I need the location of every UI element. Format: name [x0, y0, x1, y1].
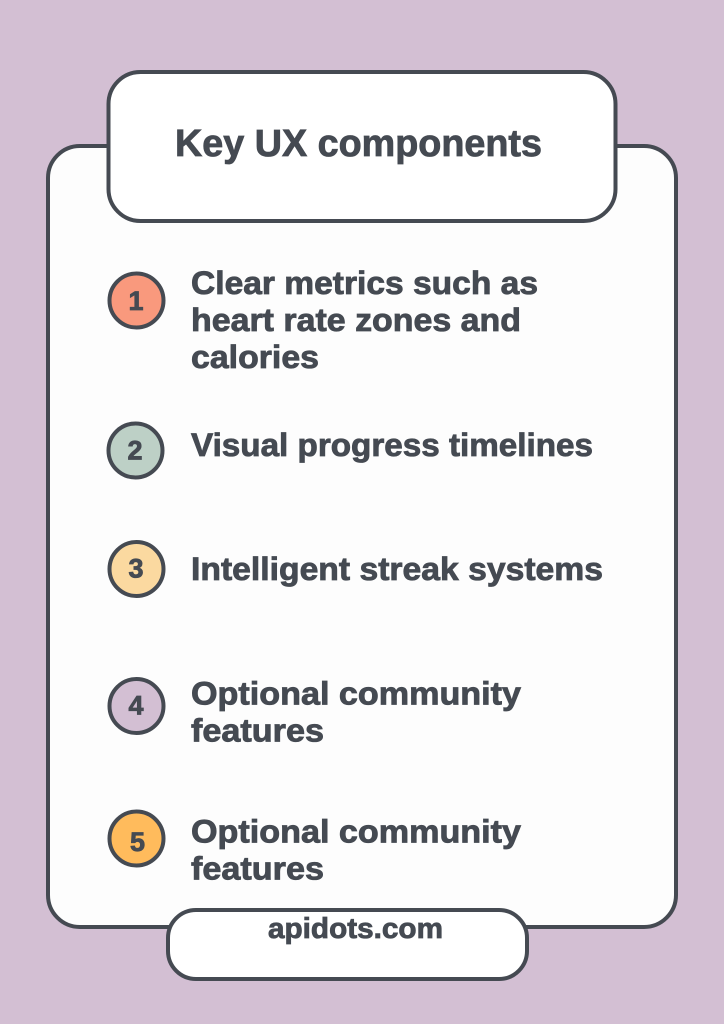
footer website text: apidots.com: [268, 913, 443, 945]
list item 2: [108, 424, 593, 478]
list item 5: [110, 812, 521, 886]
list item 4: [110, 676, 521, 748]
icon: number 3 badge: 3: [128, 554, 144, 584]
list item 1: [110, 265, 538, 375]
text: item 4: features: [191, 712, 324, 748]
text: item 4: [191, 676, 521, 748]
icon: number 5 badge: 5: [130, 827, 145, 857]
text: item 5: features: [191, 850, 324, 886]
title: Key UX components: [175, 123, 542, 165]
text: item 5: [191, 814, 521, 886]
text: item 2: Visual progress timelines: [191, 427, 593, 463]
icon: number 2 badge: [108, 424, 162, 478]
text: item 5: Optional community: [191, 814, 521, 850]
text: item 4: Optional community: [191, 676, 521, 712]
icon: number 1 badge: [110, 274, 164, 328]
icon: number 3 badge: [110, 542, 164, 596]
text: item 3: Intelligent streak systems: [191, 551, 603, 587]
list item 3: [110, 542, 603, 596]
icon: number 1 badge: 1: [128, 286, 144, 316]
panel: main card: [48, 146, 676, 927]
panel: title box: [108, 72, 616, 221]
panel: footer box: [168, 910, 527, 979]
text: item 1: heart rate zones and: [191, 302, 521, 338]
icon: number 4 badge: [110, 679, 164, 733]
text: item 1: [191, 265, 538, 375]
icon: number 4 badge: 4: [128, 690, 144, 720]
icon: number 2 badge: 2: [127, 436, 143, 466]
text: item 1: calories: [191, 339, 319, 375]
text: item 1: Clear metrics such as: [191, 265, 538, 301]
icon: number 5 badge: [110, 812, 164, 866]
